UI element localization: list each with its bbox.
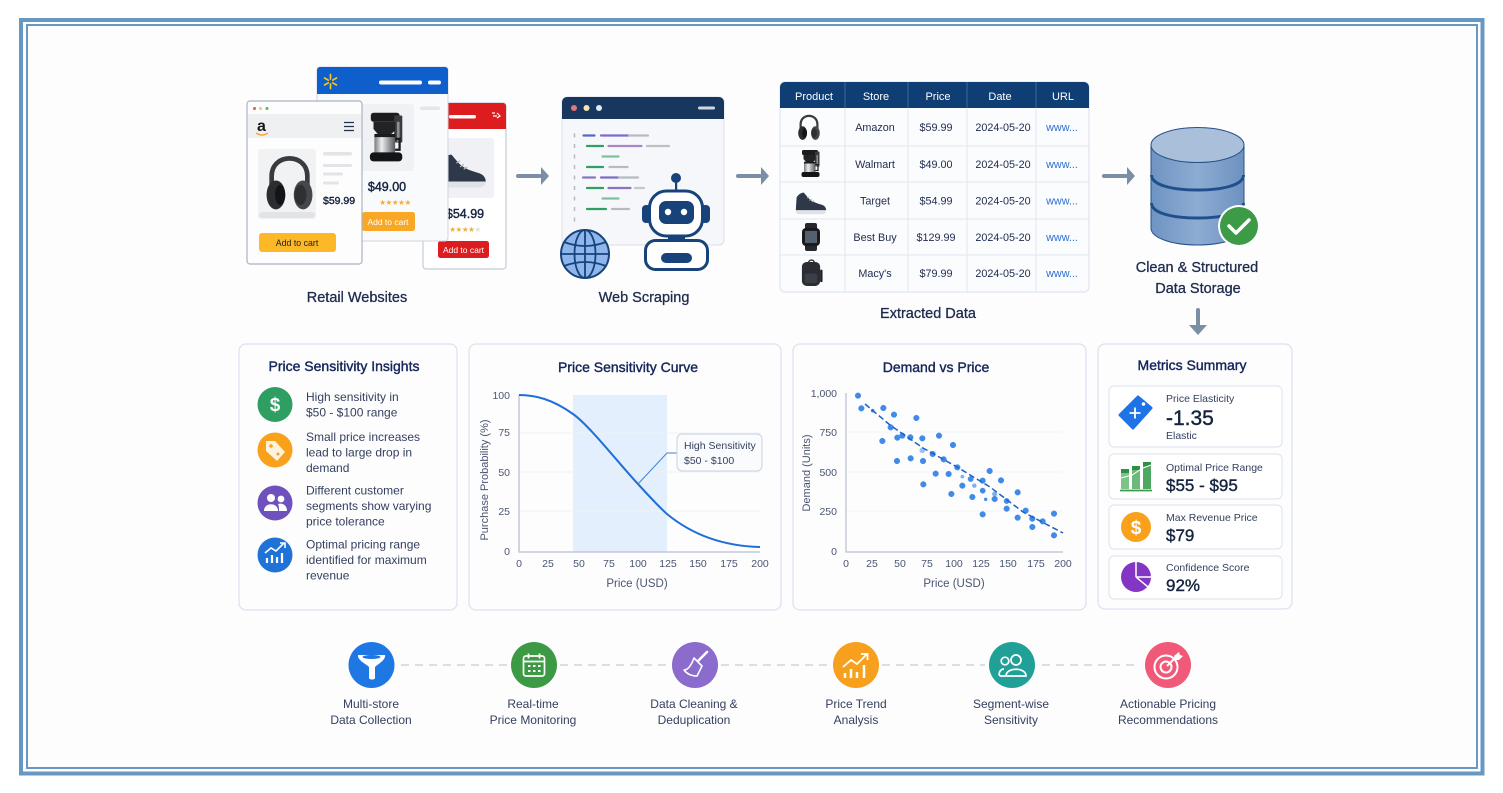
table: extracted data: www... [1045, 196, 1078, 208]
heading: Price Sensitivity Curve [558, 359, 698, 375]
highlighted range [573, 395, 667, 552]
step: data cleaning [650, 642, 738, 727]
card: target: $54.99 [446, 207, 484, 221]
metric: price elasticity: Price Elasticity [1166, 393, 1235, 405]
table: extracted data [780, 82, 1089, 292]
table: extracted data: $79.99 [919, 268, 953, 280]
step: segment-wise sensitivity [973, 642, 1049, 727]
table: extracted data: www... [1045, 159, 1078, 171]
icon: robot [642, 173, 710, 270]
metric: price elasticity: Elastic [1166, 430, 1197, 442]
arrow: storage down [1189, 308, 1207, 335]
x axis labels: 200 [751, 558, 769, 570]
step: actionable pricing recommendations: Recommendations [1118, 713, 1218, 727]
step: actionable pricing recommendations [1118, 642, 1218, 727]
table: extracted data: Macy's [858, 268, 892, 280]
x axis labels: 125 [659, 558, 677, 570]
table: extracted data: Product [795, 91, 833, 103]
card: walmart [317, 67, 448, 241]
callout leader [638, 453, 677, 484]
table: extracted data: Best Buy [853, 232, 897, 244]
text: insight 2: demand [306, 461, 349, 475]
text: insight 4: revenue [306, 568, 350, 582]
table: extracted data: 2024-05-20 [975, 196, 1031, 208]
y axis labels: 0 [831, 546, 837, 558]
card: walmart: $49.00 [368, 180, 406, 194]
icon: database with check [1151, 128, 1260, 247]
callout: $50 - $100 [684, 455, 734, 467]
x axis labels: 200 [1054, 558, 1072, 570]
x axis labels: 75 [603, 558, 615, 570]
step: price trend analysis [825, 642, 887, 727]
y axis labels: 500 [819, 467, 837, 479]
y axis labels: 25 [498, 506, 510, 518]
table: extracted data: Target [860, 196, 890, 208]
y axis labels: 100 [492, 390, 510, 402]
table: extracted data: www... [1045, 122, 1078, 134]
arrow: retail to scraping [516, 167, 549, 185]
text: insight 4: Optimal pricing range [306, 538, 420, 552]
group: web scraping [561, 97, 724, 278]
axis title: price: Price (USD) [923, 578, 985, 590]
table: extracted data: URL [1052, 91, 1074, 103]
table: extracted data: $129.99 [916, 232, 956, 244]
text: insight 3: Different customer [306, 484, 404, 498]
icon: dollar: $ [270, 395, 281, 416]
table: extracted data: Store [863, 91, 889, 103]
x axis labels: 50 [573, 558, 585, 570]
metric: max revenue price: $ [1131, 518, 1142, 539]
x axis labels: 150 [689, 558, 707, 570]
card: target [423, 103, 506, 269]
y axis labels: 1,000 [811, 388, 837, 400]
table: extracted data: www... [1045, 268, 1078, 280]
metric: confidence score [1109, 556, 1282, 599]
table: extracted data: 2024-05-20 [975, 268, 1031, 280]
card: amazon: a [257, 118, 266, 135]
callout [677, 434, 762, 471]
card: amazon [247, 101, 362, 264]
metric: price elasticity [1109, 386, 1282, 447]
sensitivity curve [519, 395, 760, 547]
label: web scraping: Web Scraping [599, 290, 689, 306]
y axis labels: 750 [819, 427, 837, 439]
table: extracted data: Walmart [855, 159, 895, 171]
step: price trend analysis: Analysis [834, 713, 878, 727]
table: extracted data: $54.99 [919, 196, 953, 208]
x axis labels: 175 [1027, 558, 1045, 570]
code window [562, 97, 724, 245]
text: insight 2: Small price increases [306, 430, 420, 444]
label: clean storage [1136, 260, 1258, 297]
scatter points [855, 393, 1057, 538]
grid and axes [846, 432, 1063, 511]
x axis labels: 100 [945, 558, 963, 570]
arrow: scraping to table [736, 167, 769, 185]
y axis labels: 250 [819, 506, 837, 518]
table: extracted data: 2024-05-20 [975, 159, 1031, 171]
table: extracted data: $59.99 [919, 122, 953, 134]
x axis labels [516, 558, 769, 570]
panel: price sensitivity curve [469, 344, 781, 610]
step: multi-store data collection: Multi-store [343, 697, 399, 711]
metric: optimal price range [1109, 454, 1282, 499]
table: extracted data: Amazon [855, 122, 895, 134]
metric: max revenue price [1109, 505, 1282, 549]
card: walmart: Add to cart [367, 217, 409, 227]
y axis labels: 0 [504, 546, 510, 558]
text: insight 4: identified for maximum [306, 553, 427, 567]
step: real-time price monitoring: Price Monitoring [490, 713, 576, 727]
x axis labels: 125 [972, 558, 990, 570]
metric: confidence score: Confidence Score [1166, 562, 1250, 574]
x axis labels: 25 [542, 558, 554, 570]
step: actionable pricing recommendations: Actionable Pricing [1120, 697, 1216, 711]
panel: demand vs price [793, 344, 1086, 610]
dashed connector [401, 664, 1140, 666]
x axis labels [843, 558, 1072, 570]
card: target: ★★★★★ [449, 225, 481, 234]
step: price trend analysis: Price Trend [825, 697, 887, 711]
label: extracted data: Extracted Data [880, 306, 977, 322]
y axis labels: 75 [498, 427, 510, 439]
label: clean storage: Clean & Structured [1136, 260, 1258, 276]
text: insight 3: price tolerance [306, 514, 385, 528]
x axis labels: 50 [894, 558, 906, 570]
text: insight 1: High sensitivity in [306, 390, 399, 404]
table: extracted data: Date [988, 91, 1012, 103]
y axis labels [811, 388, 837, 558]
x axis labels: 100 [629, 558, 647, 570]
group: retail websites [247, 67, 506, 269]
x axis labels: 0 [843, 558, 849, 570]
step: real-time price monitoring [490, 642, 576, 727]
table: extracted data: 2024-05-20 [975, 232, 1031, 244]
panel: metrics summary [1098, 344, 1292, 609]
card: amazon: Add to cart [276, 238, 319, 248]
step: segment-wise sensitivity: Segment-wise [973, 697, 1049, 711]
axis title: probability: Purchase Probability (%) [479, 419, 491, 541]
step: segment-wise sensitivity: Sensitivity [984, 713, 1038, 727]
panel: price sensitivity insights [239, 344, 457, 610]
card: walmart: ★★★★★ [379, 198, 411, 207]
text: insight 1: $50 - $100 range [306, 406, 398, 420]
heading: Demand vs Price [883, 359, 990, 375]
x axis labels: 175 [720, 558, 738, 570]
y axis labels [492, 390, 510, 558]
label: clean storage: Data Storage [1155, 281, 1241, 297]
step: data cleaning: Data Cleaning & [650, 697, 738, 711]
metric: max revenue price: Max Revenue Price [1166, 512, 1258, 524]
icon: growth chart [258, 538, 292, 572]
trend line [865, 404, 1063, 533]
axis title: demand: Demand (Units) [801, 434, 813, 512]
step: multi-store data collection: Data Collection [330, 713, 412, 727]
y axis labels: 50 [498, 467, 510, 479]
card: amazon: $59.99 [323, 195, 355, 207]
heading: Metrics Summary [1138, 357, 1246, 373]
x axis labels: 150 [999, 558, 1017, 570]
metric: max revenue price: $79 [1166, 526, 1194, 545]
table: extracted data: Price [925, 91, 951, 103]
icon: people [258, 486, 292, 520]
text: insight 2: lead to large drop in [306, 446, 412, 460]
metric: optimal price range: $55 - $95 [1166, 476, 1238, 495]
step: multi-store data collection [330, 642, 412, 727]
x axis labels: 75 [921, 558, 933, 570]
step: real-time price monitoring: Real-time [507, 697, 559, 711]
icon: dollar [258, 387, 292, 422]
grid and axes [519, 433, 760, 511]
metric: price elasticity: -1.35 [1166, 407, 1214, 430]
table: extracted data: 2024-05-20 [975, 122, 1031, 134]
icon: tag [258, 432, 292, 468]
metric: confidence score: 92% [1166, 576, 1200, 595]
arrow: table to storage [1102, 167, 1135, 185]
callout: High Sensitivity [684, 440, 757, 452]
step: data cleaning: Deduplication [658, 713, 730, 727]
table: extracted data: www... [1045, 232, 1078, 244]
icon: globe [561, 230, 609, 278]
metric: optimal price range: Optimal Price Range [1166, 462, 1263, 474]
x axis labels: 0 [516, 558, 522, 570]
x axis labels: 25 [866, 558, 878, 570]
axis title: price: Price (USD) [606, 578, 668, 590]
icon: check badge [1218, 205, 1260, 247]
text: insight 3: segments show varying [306, 499, 431, 513]
heading: Price Sensitivity Insights [269, 358, 419, 374]
card: target: Add to cart [443, 245, 485, 255]
label: retail websites: Retail Websites [307, 290, 407, 306]
table: extracted data: $49.00 [919, 159, 953, 171]
